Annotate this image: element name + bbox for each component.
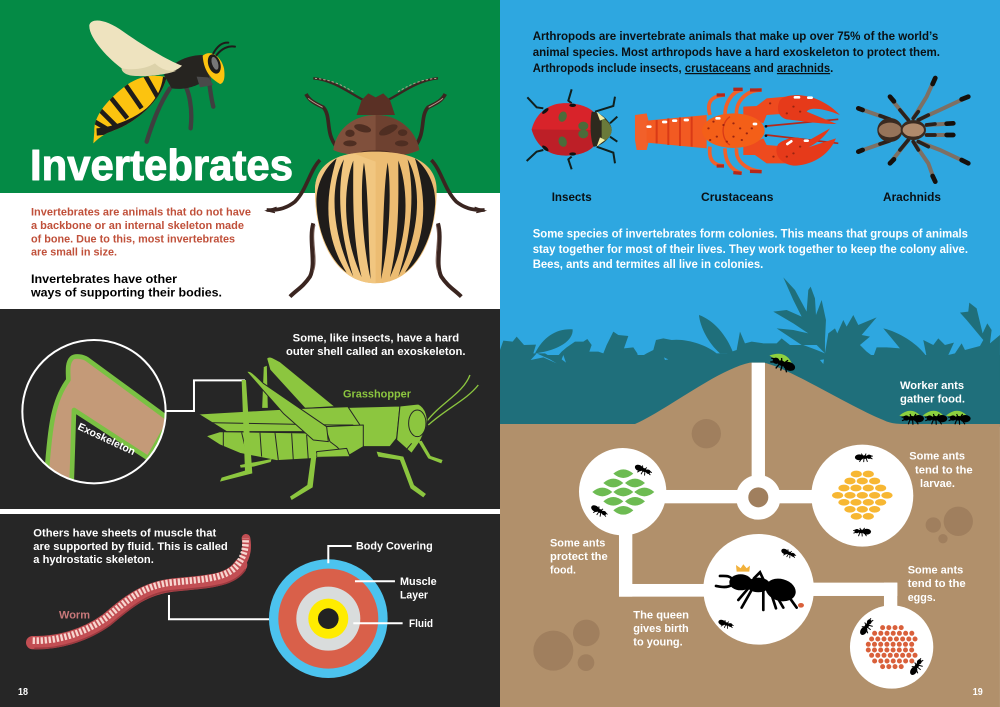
label: Crustaceans: Crustaceans bbox=[701, 190, 774, 204]
label: Body Covering: Body Covering bbox=[356, 540, 433, 552]
chamber: larvae bbox=[811, 445, 913, 547]
caption: worker ants: gather food. bbox=[900, 394, 965, 406]
chamber: food bbox=[579, 448, 666, 535]
queen ant bbox=[716, 564, 804, 610]
exoskeleton magnifier bbox=[22, 340, 245, 483]
text block: definition: are small in size. bbox=[31, 247, 117, 259]
ground bbox=[500, 363, 1000, 707]
text block: definition: a backbone or an internal skeleton made bbox=[31, 220, 244, 232]
text block: exoskeleton caption: outer shell called an exoskeleton. bbox=[286, 346, 466, 358]
soil spots bbox=[533, 419, 973, 671]
page number 19: 19 bbox=[973, 687, 983, 698]
text block: definition: of bone. Due to this, most invertebrates bbox=[31, 233, 235, 245]
text block: exoskeleton caption: Some, like insects, have a hard bbox=[293, 333, 459, 345]
text block: other ways: ways of supporting their bodies. bbox=[30, 286, 222, 300]
label: Insects: Insects bbox=[552, 190, 592, 204]
ant carrying leaf on mound bbox=[766, 350, 798, 375]
ant nest cross-section bbox=[500, 350, 1000, 707]
text block: colonies: Some species of invertebrates form colonies. This means that groups of animals bbox=[533, 227, 968, 241]
caption: eggs: eggs. bbox=[908, 592, 936, 604]
panel: dark exoskeleton section bbox=[0, 309, 500, 509]
caption: protect food: food. bbox=[550, 564, 576, 576]
text block: colonies bbox=[533, 227, 968, 271]
chamber: queen bbox=[703, 534, 814, 645]
text block: colonies: stay together for most of their lives. They work together to keep the colony alive. bbox=[533, 242, 968, 256]
text block: hydrostatic caption: Others have sheets of muscle that bbox=[33, 528, 217, 540]
label: Fluid: Fluid bbox=[409, 618, 433, 630]
foliage silhouette bbox=[500, 277, 1000, 380]
panel: dark hydrostatic section bbox=[0, 514, 500, 707]
text block: arthropods bbox=[533, 29, 940, 75]
caption: larvae bbox=[909, 451, 973, 490]
label: Muscle Layer bbox=[400, 576, 437, 602]
chamber: eggs bbox=[850, 605, 933, 689]
caption: eggs: Some ants bbox=[908, 565, 963, 577]
icon: worm bbox=[33, 538, 270, 648]
icon: tarantula bbox=[858, 78, 968, 182]
text block: other ways bbox=[30, 272, 222, 300]
panel: green header bbox=[0, 0, 500, 193]
diagram: worm cross-section bbox=[269, 546, 403, 678]
label: Arachnids: Arachnids bbox=[883, 190, 941, 204]
caption: protect food bbox=[550, 538, 608, 576]
caption: queen: gives birth bbox=[633, 623, 689, 635]
caption: eggs: tend to the bbox=[908, 578, 966, 590]
text block: hydrostatic caption: a hydrostatic skeleton. bbox=[33, 554, 154, 566]
icon: crayfish bbox=[635, 89, 840, 173]
text block: other ways: Invertebrates have other bbox=[31, 272, 177, 286]
text block: arthropods: animal species. Most arthropods have a hard exoskeleton to protect them. bbox=[533, 45, 940, 59]
caption: protect food: protect the bbox=[550, 551, 608, 563]
caption: queen: The queen bbox=[633, 610, 689, 622]
worker ants bbox=[899, 411, 971, 425]
text block: arthropods: Arthropods include insects, crustaceans and arachnids. bbox=[533, 61, 833, 75]
panel: blue sky bbox=[500, 0, 1000, 360]
panel: teal ground band bbox=[500, 355, 1000, 427]
page number 18: 18 bbox=[18, 687, 28, 698]
label: Worm: Worm bbox=[59, 610, 90, 622]
icon: ladybird bbox=[527, 89, 617, 169]
icon: colorado beetle bbox=[267, 78, 485, 297]
central chamber bbox=[736, 475, 781, 520]
icon: grasshopper bbox=[198, 357, 478, 500]
caption: larvae: tend to the bbox=[915, 464, 973, 476]
caption: queen bbox=[633, 610, 689, 649]
label: Exoskeleton: Exoskeleton bbox=[76, 421, 137, 458]
label: Muscle Layer: Muscle bbox=[400, 576, 437, 588]
label: Muscle Layer: Layer bbox=[400, 590, 429, 602]
text block: definition: Invertebrates are animals that do not have bbox=[31, 207, 251, 219]
caption: larvae: larvae. bbox=[920, 478, 955, 490]
title: Invertebrates bbox=[30, 141, 293, 190]
label: Grasshopper: Grasshopper bbox=[343, 389, 412, 401]
caption: protect food: Some ants bbox=[550, 538, 605, 550]
text block: colonies: Bees, ants and termites all live in colonies. bbox=[533, 257, 763, 271]
icon: wasp bbox=[89, 20, 235, 143]
text block: hydrostatic caption: are supported by fluid. This is called bbox=[33, 541, 228, 553]
text block: hydrostatic caption bbox=[33, 528, 228, 566]
panel: white intro bbox=[0, 193, 500, 309]
caption: worker ants: Worker ants bbox=[900, 380, 964, 392]
caption: eggs bbox=[908, 565, 966, 604]
text block: definition bbox=[31, 207, 251, 259]
caption: worker ants bbox=[900, 380, 965, 406]
tunnels bbox=[619, 363, 897, 609]
caption: queen: to young. bbox=[633, 637, 683, 649]
text block: arthropods: Arthropods are invertebrate animals that make up over 75% of the world’s bbox=[533, 29, 939, 43]
caption: larvae: Some ants bbox=[909, 451, 965, 463]
text block: exoskeleton caption bbox=[286, 333, 466, 358]
